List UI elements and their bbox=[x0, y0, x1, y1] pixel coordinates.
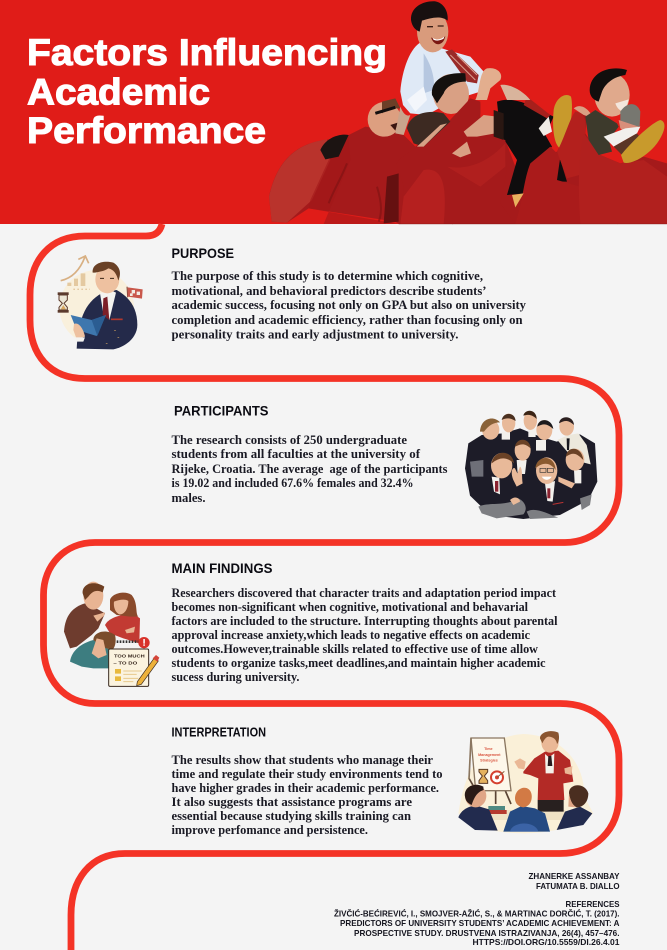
icon: stressed student with parents and to-do list: TOO MUCH bbox=[114, 654, 145, 659]
text: purpose: academic success, focusing not only on GPA but also on university bbox=[172, 298, 527, 312]
text: interpretation: It also suggests that assistance programs are bbox=[172, 795, 412, 809]
icon: presenter teaching time management bbox=[458, 731, 593, 833]
text: participants: Rijeke, Croatia. The average age of the participants bbox=[172, 462, 448, 476]
text: participants: The research consists of 250 undergraduate bbox=[172, 433, 407, 447]
text: interpretation: The results show that students who manage their bbox=[172, 753, 433, 767]
text: main findings: Researchers discovered that character traits and adaptation period impact bbox=[172, 586, 557, 600]
references: ŽIVČIĆ-BEĆIREVIĆ, I., SMOJVER-AŽIĆ, S., & MARTINAC DORČIĆ, T. (2017). bbox=[334, 908, 620, 918]
text: main findings: students to organize tasks,meet deadlines,and maintain higher academic bbox=[172, 656, 546, 670]
panel: participants bbox=[172, 402, 597, 519]
panel: interpretation bbox=[172, 724, 593, 837]
panel: purpose bbox=[58, 245, 527, 349]
authors bbox=[528, 871, 620, 891]
title: Factors Influencing bbox=[27, 32, 387, 73]
icon: student reading with growth chart bbox=[58, 256, 143, 349]
text: interpretation: have higher grades in their academic performance. bbox=[172, 781, 439, 795]
footer: authors and references bbox=[334, 871, 620, 947]
student with glasses bbox=[368, 102, 401, 137]
header photo: teacher lifted by students bbox=[269, 1, 667, 224]
authors: FATUMATA B. DIALLO bbox=[536, 881, 620, 891]
title bbox=[27, 32, 387, 151]
heading: purpose: PURPOSE bbox=[172, 245, 234, 261]
red connecting ribbon bbox=[30, 224, 619, 950]
text: purpose bbox=[172, 269, 527, 342]
text: participants: is 19.02 and included 67.6% females and 32.4% bbox=[172, 476, 414, 490]
teacher body bbox=[400, 1, 484, 115]
right sweaters bbox=[515, 147, 587, 224]
icon: stressed student with parents and to-do list bbox=[64, 582, 159, 686]
text: main findings: sucess during university. bbox=[172, 670, 300, 684]
text: main findings: approval increase anxiety,which leads to negative effects on academic bbox=[172, 628, 530, 642]
title: Performance bbox=[27, 110, 266, 151]
text: interpretation: time and regulate their study environments tend to bbox=[172, 767, 442, 781]
text: participants: students from all faculties at the university of bbox=[172, 447, 421, 461]
heading: main findings: MAIN FINDINGS bbox=[172, 560, 272, 576]
title: Academic bbox=[27, 72, 210, 112]
text: main findings bbox=[172, 586, 558, 684]
text: purpose: completion and academic efficiency, rather than focusing only on bbox=[172, 313, 522, 327]
teacher legs bbox=[497, 100, 554, 195]
heading: interpretation: INTERPRETATION bbox=[172, 724, 266, 740]
icon: presenter teaching time management: Time bbox=[484, 747, 493, 751]
icon: presenter teaching time management: Strategies bbox=[480, 759, 498, 763]
text: main findings: factors are included to the structure. Interrupting thoughts about parental bbox=[172, 614, 558, 628]
header banner bbox=[0, 0, 667, 224]
heading: participants: PARTICIPANTS bbox=[174, 402, 268, 418]
authors: ZHANERKE ASSANBAY bbox=[528, 871, 620, 881]
references bbox=[334, 899, 620, 947]
text: purpose: motivational, and behavioral predictors describe students’ bbox=[172, 284, 486, 298]
text: purpose: personality traits and early adjustment to university. bbox=[172, 328, 458, 342]
centre student bbox=[433, 74, 469, 114]
icon: stressed student with parents and to-do list: – TO DO bbox=[113, 660, 138, 665]
text: interpretation: improve perfomance and persistence. bbox=[172, 823, 368, 837]
references: PROSPECTIVE STUDY. DRUSTVENA ISTRAZIVANJA, 26(4), 457–476. bbox=[354, 928, 620, 938]
icon: presenter teaching time management: Management bbox=[478, 753, 501, 757]
text: interpretation: essential because studying skills training can bbox=[172, 809, 411, 823]
text: participants bbox=[172, 433, 448, 505]
references: PREDICTORS OF UNIVERSITY STUDENTS’ ACADEMIC ACHIEVEMENT: A bbox=[340, 918, 620, 928]
references: HTTPS://DOI.ORG/10.5559/DI.26.4.01 bbox=[472, 937, 620, 947]
panel: main findings bbox=[64, 560, 558, 686]
text: purpose: The purpose of this study is to determine which cognitive, bbox=[172, 269, 483, 283]
text: interpretation bbox=[172, 753, 442, 837]
text: main findings: outcomes.However,trainable skills related to effective use of time allow bbox=[172, 642, 539, 656]
references: REFERENCES bbox=[566, 899, 620, 909]
text: participants: males. bbox=[172, 491, 206, 505]
text: main findings: becomes non-significant when cognitive, motivational and behavarial bbox=[172, 600, 528, 614]
right student bbox=[585, 110, 619, 155]
icon: group of students bbox=[465, 411, 597, 519]
